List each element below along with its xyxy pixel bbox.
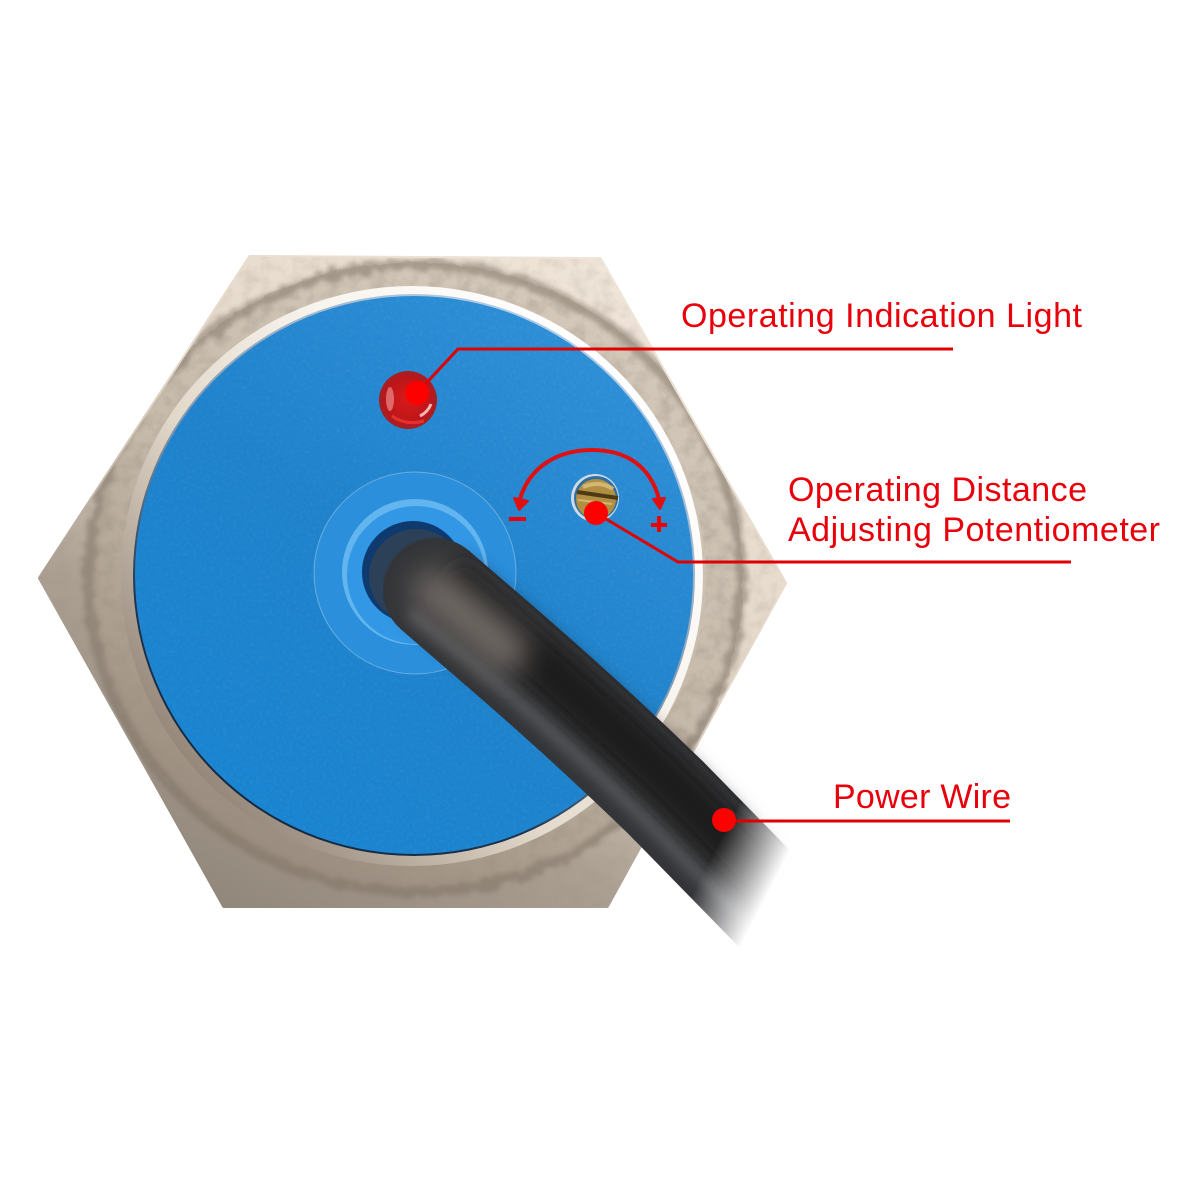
marker dot on cable xyxy=(712,808,736,832)
hexagonal metal nut xyxy=(40,257,785,906)
label: potentiometer: Adjusting Potentiometer xyxy=(788,511,1160,549)
black power cable xyxy=(410,580,810,957)
label: operating indication light xyxy=(405,297,1083,405)
label: potentiometer: Operating Distance xyxy=(788,471,1087,509)
plus sign xyxy=(651,516,667,532)
label: operating indication light: Operating Indication Light xyxy=(681,297,1083,335)
marker dot on screw xyxy=(584,501,608,525)
leader line to LED xyxy=(417,349,953,393)
brass potentiometer screw xyxy=(571,474,619,522)
leader line to screw xyxy=(596,513,1071,562)
adjustment arc arrow xyxy=(509,450,667,532)
marker dot on LED xyxy=(405,381,429,405)
cable grommet xyxy=(314,472,516,674)
minus arrowhead xyxy=(514,498,528,510)
leader line to cable xyxy=(724,820,1010,822)
red LED indicator xyxy=(379,371,437,429)
blue sensor face xyxy=(133,294,695,856)
label: power wire: Power Wire xyxy=(833,778,1011,816)
label: potentiometer xyxy=(584,471,1160,562)
label: power wire xyxy=(712,778,1011,832)
minus sign xyxy=(509,517,526,521)
plus arrowhead xyxy=(653,498,665,509)
